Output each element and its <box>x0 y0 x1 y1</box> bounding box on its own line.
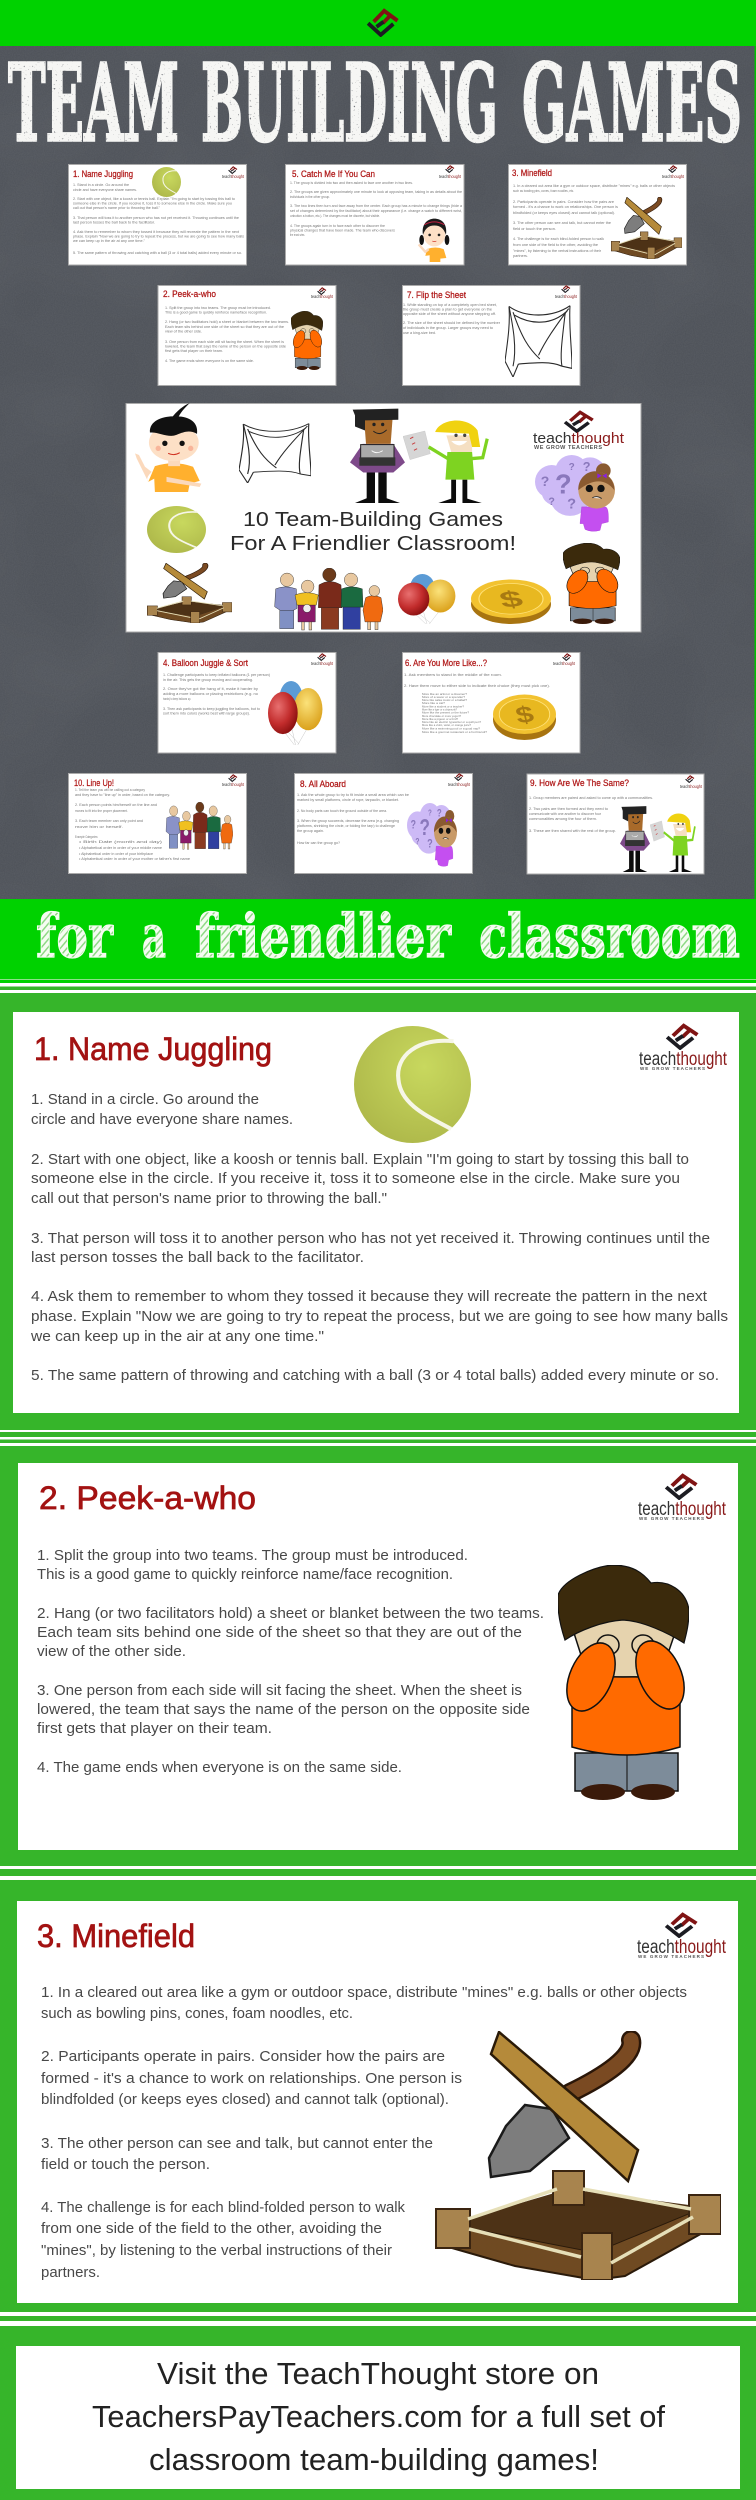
text block: field or touch the person. <box>41 2157 210 2173</box>
slide thumbnail: Peek-a-who <box>158 286 336 386</box>
slide thumbnail: All Aboard: marked by small platforms, circle of rope, tarpaulin, or blanket. <box>297 798 399 802</box>
slide thumbnail: Minefield: 3. Minefield <box>512 168 552 178</box>
slide thumbnail: Peek-a-who: 3. One person from each side will sit facing the sheet. When the sheet is <box>165 340 284 344</box>
slide thumbnail: Line Up: • Birth Date (month and day) <box>79 840 162 844</box>
text block: last person tosses the ball back to the facilitator. <box>31 1250 364 1266</box>
slide thumbnail: Flip the Sheet: 2. The size of the sheet should be defined by the number <box>403 321 501 325</box>
subtitle: a <box>142 902 166 972</box>
list of questions: More like a swimming pool or a good nap? <box>422 726 480 730</box>
list of questions: More like an artist or a dreamer? <box>422 692 467 696</box>
slide thumbnail: Name Juggling <box>68 164 246 265</box>
cover illustration: man with laptop <box>350 409 405 503</box>
slide thumbnail: Balloon Juggle and Sort: 3. Then ask participants to keep juggling the balloons, but to <box>163 707 260 711</box>
slide thumbnail: Minefield: 1. In a cleared out area like a gym or outdoor space, distribute "mines" e.g. balls or other objects <box>513 184 675 188</box>
cover logo <box>533 412 625 451</box>
slide thumbnail: Peek-a-who: 1. Split the group into two teams. The group must be introduced. <box>165 306 271 310</box>
slide thumbnail: Flip the Sheet: use a king-size bed. <box>403 331 436 335</box>
logo: WE GROW TEACHERS <box>638 1954 704 1959</box>
slide thumbnail: Name Juggling: last person tosses the ball back to the facilitator. <box>73 220 155 224</box>
slide thumbnail: Minefield: blindfolded (or keeps eyes closed) and cannot talk (optional). <box>513 211 615 215</box>
text block: 4. Ask them to remember to whom they tossed it because they will recreate the pattern in the next <box>31 1289 707 1305</box>
slide thumbnail: Name Juggling: phase. Explain "Now we are going to try to repeat the process, but we are going to see how many balls <box>73 234 244 238</box>
logo <box>638 1476 727 1521</box>
slide thumbnail: Line Up: and they have to "line up" in order, based on the category. <box>75 793 170 797</box>
slide thumbnail: How Are We The Same: 1. Group members are paired and asked to come up with a commonalities. <box>529 796 653 800</box>
list of questions: More of a saver or a spender? <box>422 695 466 699</box>
cover logo: teachthought <box>533 430 625 447</box>
slide thumbnail: Balloon Juggle and Sort: hands) to keep balloons up. <box>163 697 191 701</box>
panel: call to action: Visit the TeachThought store on <box>157 2356 599 2391</box>
list of questions: More like a cat? <box>422 701 446 705</box>
slide thumbnail: Balloon Juggle and Sort: adding a more balloons or placing restrictions (e.g. no <box>163 692 258 696</box>
slide thumbnail: Flip the Sheet: 1. While standing on top of a completely open bed sheet, <box>403 303 497 307</box>
cover illustration: minefield <box>147 563 232 623</box>
slide thumbnail: Are You More Like: 6. Are You More Like...? <box>405 658 487 668</box>
text block <box>30 1092 728 1384</box>
slide thumbnail: Catch Me If You Can: set of changes determined by the facilitator) about their appearance (i.e. change a watch to different wrist, <box>290 209 462 213</box>
heading: 3. Minefield <box>37 1918 195 1954</box>
text block: such as bowling pins, cones, foam noodles, etc. <box>41 2006 353 2022</box>
slide thumbnail: Peek-a-who: teachthought <box>311 294 334 299</box>
slide thumbnail: Peek-a-who: Each team sits behind one side of the sheet so that they are out of the <box>165 325 284 329</box>
cover heading: 10 Team-Building Games <box>243 509 503 531</box>
text block: call out that person's name prior to throwing the ball." <box>31 1191 387 1207</box>
text block: 2. Participants operate in pairs. Consider how the pairs are <box>41 2049 445 2065</box>
logo: teachthought <box>639 1049 728 1070</box>
text block: blindfolded (or keeps eyes closed) and cannot talk (optional). <box>41 2092 449 2108</box>
panel: call to action <box>16 2346 740 2489</box>
slide thumbnail: How Are We The Same: communicate with one another to discover four <box>529 812 602 816</box>
logo: WE GROW TEACHERS <box>639 1516 704 1521</box>
text block: lowered, the team that says the name of the person on the opposite side <box>37 1702 530 1718</box>
slide thumbnail: Flip the Sheet: teachthought <box>555 294 578 299</box>
slide thumbnail: Flip the Sheet: the group must create a plan to get everyone on the <box>403 308 492 312</box>
slide thumbnail: Are You More Like: teachthought <box>553 661 576 666</box>
text block: Each team sits behind one side of the sheet so that they are out of the <box>37 1625 522 1641</box>
slide thumbnail: Line Up: • Alphabetical order in order of your birthplace <box>79 852 153 856</box>
cover illustration: woman with checklist <box>403 420 487 503</box>
slide thumbnail: How Are We The Same: teachthought <box>680 784 703 789</box>
text block: partners. <box>41 2265 100 2281</box>
text block: from one side of the field to the other, avoiding the <box>41 2221 382 2237</box>
slide thumbnail: All Aboard: 1. Ask the whole group to try to fit inside a small area which can be <box>297 793 409 797</box>
slide thumbnail: Line Up: • Alphabetical order in order of your middle name <box>79 846 162 850</box>
title: TEAM <box>8 42 179 166</box>
text block: This is a good game to quickly reinforce name/face recognition. <box>37 1567 453 1583</box>
slide thumbnail: Catch Me If You Can: 4. The groups again turn in to face each other to discover the <box>290 224 385 228</box>
slide thumbnail: Minefield: from one side of the field to the other, avoiding the <box>513 243 598 247</box>
subtitle: for <box>36 902 114 972</box>
slide thumbnail: Minefield: such as bowling pins, cones, foam noodles, etc. <box>513 189 574 193</box>
logo: teachthought <box>638 1499 727 1520</box>
slide thumbnail: Flip the Sheet: 7. Flip the Sheet <box>407 290 466 300</box>
slide thumbnail: How Are We The Same: commonalities among the four of them. <box>529 817 597 821</box>
slide thumbnail: Are You More Like: 1. Ask members to stand in the middle of the room. <box>404 673 502 677</box>
slide thumbnail: All Aboard: teachthought <box>448 782 471 787</box>
text block: 4. The challenge is for each blind-folded person to walk <box>41 2200 406 2216</box>
panel: 2. Peek-a-who <box>18 1463 738 1850</box>
text block: view of the other side. <box>37 1644 186 1660</box>
logo: teachthought <box>637 1937 727 1958</box>
slide thumbnail: Balloon Juggle and Sort: sort them into colors (works best with large groups). <box>163 712 250 716</box>
subtitle: friendlier <box>195 902 452 972</box>
text block: formed - it's a chance to work on relationships. One person is <box>41 2071 462 2087</box>
slide thumbnail: Line Up: Example Categories: <box>75 835 98 839</box>
slide thumbnail: Peek-a-who: lowered, the team that says the name of the person on the opposite side <box>165 344 286 348</box>
text block: we can keep up in the air at any one time." <box>30 1329 324 1345</box>
list of questions: More like the present or the future? <box>422 711 469 715</box>
slide thumbnail: How Are We The Same <box>527 774 704 874</box>
slide thumbnail: Minefield: formed - it's a chance to work on relationships. One person is <box>513 205 618 209</box>
heading: 2. Peek-a-who <box>39 1480 256 1516</box>
list of questions: More like a student or a teacher? <box>422 704 464 708</box>
cover illustration: gold coin <box>471 579 551 624</box>
slide thumbnail: How Are We The Same: 3. These are then shared with the rest of the group. <box>529 829 616 833</box>
text block: 1. In a cleared out area like a gym or outdoor space, distribute "mines" e.g. balls or other objects <box>41 1985 687 2001</box>
slide thumbnail: Are You More Like <box>402 652 580 753</box>
slide thumbnail: All Aboard: platforms, shrinking the circle, or folding the tarp) to challenge <box>297 824 395 828</box>
slide thumbnail: All Aboard: How far can the group go? <box>297 841 340 845</box>
slide thumbnail: Line Up: 1. Tell the team you will be calling out a category <box>75 788 145 792</box>
slide thumbnail: Peek-a-who: 2. Peek-a-who <box>163 289 216 299</box>
icon: child covering eyes <box>557 1565 694 1800</box>
text block: "mines", by listening to the verbal instructions of their <box>41 2243 392 2259</box>
text block: someone else in the circle. If you receive it, toss it to someone else in the circle. Make sure you <box>31 1171 680 1187</box>
slide thumbnail: Peek-a-who: view of the other side. <box>165 330 202 334</box>
slide thumbnail: Minefield: 2. Participants operate in pairs. Consider how the pairs are <box>513 200 614 204</box>
list of questions: More like a tiger or a chipmunk? <box>422 708 457 712</box>
slide thumbnail: Minefield: 3. The other person can see and talk, but cannot enter the <box>513 221 611 225</box>
cover heading <box>230 509 516 555</box>
slide thumbnail: Minefield: 4. The challenge is for each blind-folded person to walk <box>513 237 604 241</box>
text block: 3. The other person can see and talk, but cannot enter the <box>41 2136 433 2152</box>
slide thumbnail: Catch Me If You Can: teachthought <box>439 174 462 179</box>
slide: 10 Team-Building Games cover <box>126 403 641 632</box>
text block: circle and have everyone share names. <box>31 1112 293 1128</box>
slide thumbnail: Name Juggling: 4. Ask them to remember to whom they tossed it because they will recreate the pattern in the next <box>73 230 239 234</box>
slide thumbnail: Name Juggling: 5. The same pattern of throwing and catching with a ball (3 or 4 total balls) added every minute or so. <box>73 251 242 255</box>
text block: first gets that player on their team. <box>37 1721 272 1737</box>
text block: 1. Split the group into two teams. The group must be introduced. <box>37 1548 468 1564</box>
slide thumbnail: All Aboard: the group again. <box>297 829 324 833</box>
slide thumbnail: Flip the Sheet: opposite side of the sheet without anyone stepping off. <box>403 312 496 316</box>
slide thumbnail: Line Up: 2. Each person points him/herself on the line and <box>75 803 157 807</box>
slide thumbnail: Peek-a-who: This is a good game to quickly reinforce name/face recognition. <box>165 310 267 314</box>
text block <box>37 1548 544 1776</box>
slide thumbnail: Balloon Juggle and Sort <box>158 652 336 753</box>
slide thumbnail: Catch Me If You Can: 1. The group is divided into two and then asked to face one another in two lines. <box>290 181 413 185</box>
logo: WE GROW TEACHERS <box>640 1066 705 1071</box>
slide thumbnail: Name Juggling: 1. Name Juggling <box>73 169 133 179</box>
cover heading: For A Friendlier Classroom! <box>230 533 516 555</box>
slide thumbnail: Balloon Juggle and Sort: 1. Challenge participants to keep inflated balloons (1 per person) <box>163 673 270 677</box>
slide thumbnail: Line Up: • Alphabetical order in order of your mother or father's first name <box>79 857 190 861</box>
text block: phase. Explain "Now we are going to try to repeat the process, but we are going to see how many balls <box>31 1309 728 1325</box>
slide thumbnail: All Aboard: 8. All Aboard <box>300 779 346 789</box>
slide thumbnail: Minefield: teachthought <box>662 174 685 179</box>
list of questions: More like an electric typewriter or a quill pen? <box>422 720 481 724</box>
cover illustration: peeking child <box>563 543 622 624</box>
list of questions: More like salsa music or a ballad? <box>422 698 467 702</box>
list of questions: More like a violin, violet, or orange juice? <box>422 723 471 727</box>
text block: 3. That person will toss it to another person who has not yet received it. Throwing continues until the <box>31 1231 710 1247</box>
slide thumbnail: Line Up: 3. Each team member can only point and <box>75 819 143 823</box>
cover illustration: thinking girl <box>535 455 615 531</box>
slide thumbnail: Peek-a-who: 4. The game ends when everyone is on the same side. <box>165 359 254 363</box>
text block: 5. The same pattern of throwing and catching with a ball (3 or 4 total balls) added every minute or so. <box>31 1368 719 1384</box>
panel: subtitle band <box>0 899 756 984</box>
slide thumbnail: Line Up: move him or herself. <box>75 825 123 829</box>
cover illustration: tennis ball <box>147 506 206 553</box>
slide thumbnail: Name Juggling: 3. That person will toss it to another person who has not yet received it. Throwing continues until the <box>73 216 239 220</box>
cover illustration: line of people <box>275 568 383 630</box>
logo <box>637 1915 727 1959</box>
icon: shovel, plank and roped plot <box>436 2032 721 2280</box>
list of questions: More like a gourmet restaurant or a hot biscuit? <box>422 730 487 734</box>
icon: tennis ball <box>354 1026 471 1143</box>
slide thumbnail: Name Juggling: call out that person's name prior to throwing the ball." <box>73 206 161 210</box>
subtitle <box>36 902 740 972</box>
slide thumbnail: How Are We The Same: 9. How Are We The Same? <box>530 778 629 788</box>
slide thumbnail: Catch Me If You Can: individuals in the other group. <box>290 195 330 199</box>
slide thumbnail: Minefield: partners. <box>513 254 528 258</box>
slide thumbnail: How Are We The Same: 2. Two pairs are then formed and they need to <box>529 807 608 811</box>
slide thumbnail: All Aboard: 2. No body parts can touch the ground outside of the area. <box>297 809 387 813</box>
slide thumbnail: Name Juggling: circle and have everyone share names. <box>73 188 137 192</box>
text block: 4. The game ends when everyone is on the same side. <box>37 1760 402 1776</box>
panel: 1. Name Juggling <box>13 1012 739 1413</box>
slide thumbnail: Name Juggling: 2. Start with one object, like a koosh or tennis ball. Explain "I'm going to start by tossing this ball to <box>73 197 235 201</box>
slide thumbnail: Line Up <box>68 774 246 874</box>
slide thumbnail: Catch Me If You Can: 5. Catch Me If You Can <box>292 169 375 179</box>
slide thumbnail: Name Juggling: 1. Stand in a circle. Go around the <box>73 183 129 187</box>
list of questions <box>422 692 487 734</box>
slide thumbnail: Flip the Sheet: of individuals in the group. Larger groups may need to <box>403 326 493 330</box>
slide thumbnail: Minefield: "mines", by listening to the verbal instructions of their <box>513 249 602 253</box>
slide thumbnail: Name Juggling: teachthought <box>222 174 245 179</box>
slide thumbnail: Catch Me If You Can <box>286 164 464 265</box>
slide thumbnail: Line Up: teachthought <box>222 782 245 787</box>
slide thumbnail: Catch Me If You Can: physical changes that have been made. The team who discovers <box>290 228 395 232</box>
green page background <box>0 984 756 2500</box>
top green band <box>0 0 756 46</box>
panel: call to action: TeachersPayTeachers.com for a full set of <box>92 2399 665 2434</box>
logo <box>639 1026 728 1071</box>
cover illustration: balloons <box>398 574 455 624</box>
slide thumbnail: Peek-a-who: first gets that player on their team. <box>165 349 223 353</box>
slide thumbnail: Name Juggling: someone else in the circle. If you receive it, toss it to someone else in the circle. Make sure you <box>73 202 232 206</box>
slide thumbnail: Balloon Juggle and Sort: 4. Balloon Juggle & Sort <box>163 658 248 668</box>
cover illustration: kid pointing <box>135 403 201 492</box>
slide thumbnail: Balloon Juggle and Sort: 2. Once they've got the hang of it, make it harder by <box>163 687 258 691</box>
text block: 1. Stand in a circle. Go around the <box>31 1092 259 1108</box>
list of questions: More like a pigeon or a bird? <box>422 717 458 721</box>
slide thumbnail: Peek-a-who: 2. Hang (or two facilitators hold) a sheet or blanket between the two teams. <box>165 320 289 324</box>
icon: TeachThought logo mark <box>368 11 398 35</box>
cover illustration: sheet <box>239 424 311 483</box>
panel: chalkboard <box>0 42 756 899</box>
slide thumbnail: Catch Me If You Can: 3. The two lines then turn and face away from the center. Each group has a minute to change things (hide a <box>290 204 462 208</box>
slide thumbnail: Minefield: field or touch the person. <box>513 227 556 231</box>
slide thumbnail: Name Juggling: we can keep up in the air at any one time." <box>73 239 146 243</box>
slide thumbnail: All Aboard: 3. When the group succeeds, decrease the area (e.g. changing <box>297 819 399 823</box>
panel: 3. Minefield <box>17 1901 738 2303</box>
slide thumbnail: Catch Me If You Can: 2. The groups are given approximately one minute to look at opposing team, taking in as details about the <box>290 190 462 194</box>
text block: 2. Start with one object, like a koosh or tennis ball. Explain "I'm going to start by tossing this ball to <box>31 1152 689 1168</box>
slide thumbnail: Are You More Like: 2. Have them move to either side to indicate their choice (they must pick one). <box>404 684 550 688</box>
slide thumbnail: Balloon Juggle and Sort: teachthought <box>311 661 334 666</box>
heading: 1. Name Juggling <box>34 1031 272 1067</box>
slide thumbnail: Line Up: moves to fit into the proper placement. <box>75 809 128 813</box>
list of questions: More chocolate or more yogurt? <box>422 714 461 718</box>
slide thumbnail: Catch Me If You Can: unbutton a button, etc.). The changes must be discrete, but visible. <box>290 214 380 218</box>
panel: call to action: classroom team-building games! <box>149 2442 599 2477</box>
cover logo: WE GROW TEACHERS <box>534 445 602 451</box>
slide thumbnail: Balloon Juggle and Sort: in the air. This gets the group moving and cooperating. <box>163 678 253 682</box>
slide thumbnail: All Aboard <box>294 774 472 874</box>
text block: 2. Hang (or two facilitators hold) a sheet or blanket between the two teams. <box>37 1606 544 1622</box>
slide thumbnail: Flip the Sheet <box>402 286 580 386</box>
text block <box>41 1985 687 2281</box>
slide thumbnail: Line Up: 10. Line Up! <box>74 778 114 788</box>
slide thumbnail: Minefield <box>508 164 686 265</box>
slide thumbnail: Catch Me If You Can: the most wins. <box>290 233 305 237</box>
text block: 3. One person from each side will sit facing the sheet. When the sheet is <box>37 1683 522 1699</box>
